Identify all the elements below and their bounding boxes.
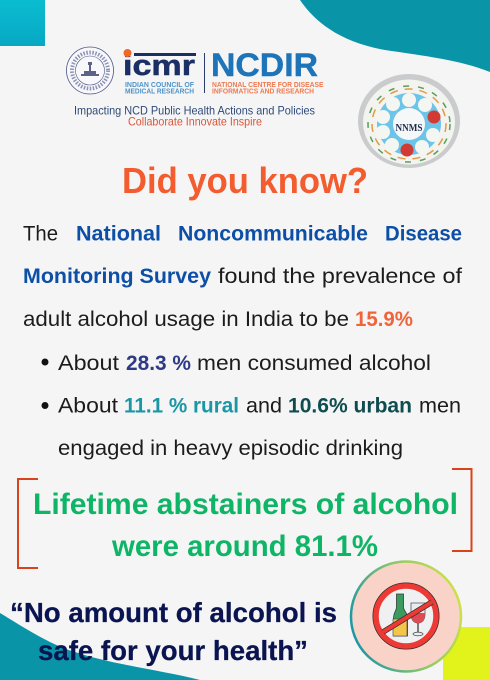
intro paragraph: found the prevalence of <box>218 265 462 288</box>
bullet: heavy episodic drinking: and <box>246 394 282 418</box>
bullet: heavy episodic drinking: 11.1 % rural <box>124 394 239 418</box>
intro paragraph: 15.9% <box>355 308 413 331</box>
bullet: heavy episodic drinking: men <box>419 394 461 418</box>
logo: NCDIR wordmark: INFORMATICS AND RESEARCH <box>212 88 314 96</box>
tagline <box>74 104 315 128</box>
logo: ICMR wordmark: INDIAN COUNCIL OF <box>125 82 195 89</box>
intro paragraph: Monitoring Survey <box>23 265 211 288</box>
bullet: heavy episodic drinking: About <box>58 394 118 418</box>
logo: ICMR wordmark <box>123 49 196 96</box>
bullet: heavy episodic drinking <box>42 394 461 460</box>
logo: NCDIR wordmark <box>211 47 324 96</box>
intro paragraph: National <box>76 222 161 246</box>
tagline: Impacting NCD Public Health Actions and Policies <box>74 104 315 118</box>
intro paragraph: Noncommunicable <box>178 222 368 246</box>
logo: NNMS seal <box>358 74 460 168</box>
bullet: heavy episodic drinking: 10.6% urban <box>288 394 412 418</box>
quote: “No amount of alcohol is <box>10 597 337 628</box>
bullet: men consumed alcohol: men consumed alcohol <box>197 352 431 375</box>
corner block: bottom right <box>443 627 490 680</box>
wave: bottom left <box>0 613 200 680</box>
corner block: top left <box>0 0 45 46</box>
bullet: men consumed alcohol: About <box>58 352 119 375</box>
bullet: men consumed alcohol: 28.3 % <box>126 352 191 375</box>
icon: no alcohol <box>351 562 461 672</box>
wave: top right <box>300 0 490 72</box>
logo: ICMR wordmark: icmr <box>123 50 195 82</box>
callout: lifetime abstainers: Lifetime abstainers of alcohol <box>33 488 458 521</box>
intro paragraph: Disease <box>385 222 462 246</box>
callout: lifetime abstainers <box>18 469 472 568</box>
logo: ICMR emblem <box>66 47 114 94</box>
intro paragraph: adult alcohol usage in India to be <box>23 308 349 331</box>
logo divider <box>204 53 205 93</box>
icon: bottle <box>394 594 408 636</box>
bullet: men consumed alcohol <box>42 352 431 375</box>
icon: glass <box>411 603 425 623</box>
tagline: Collaborate Innovate Inspire <box>128 114 262 128</box>
title: Did you know? <box>122 160 368 201</box>
quote: safe for your health” <box>38 635 308 666</box>
callout: lifetime abstainers: were around 81.1% <box>111 530 378 563</box>
logo: NCDIR wordmark: NATIONAL CENTRE FOR DISEASE <box>212 82 324 89</box>
bullet: heavy episodic drinking: engaged in heavy episodic drinking <box>58 437 403 460</box>
intro paragraph: The <box>23 222 58 246</box>
logo: NNMS seal: NNMS <box>396 123 423 134</box>
logo: NCDIR wordmark: NCDIR <box>211 47 318 83</box>
logo: ICMR wordmark: MEDICAL RESEARCH <box>125 88 194 96</box>
quote <box>10 597 337 666</box>
intro paragraph <box>23 222 462 331</box>
